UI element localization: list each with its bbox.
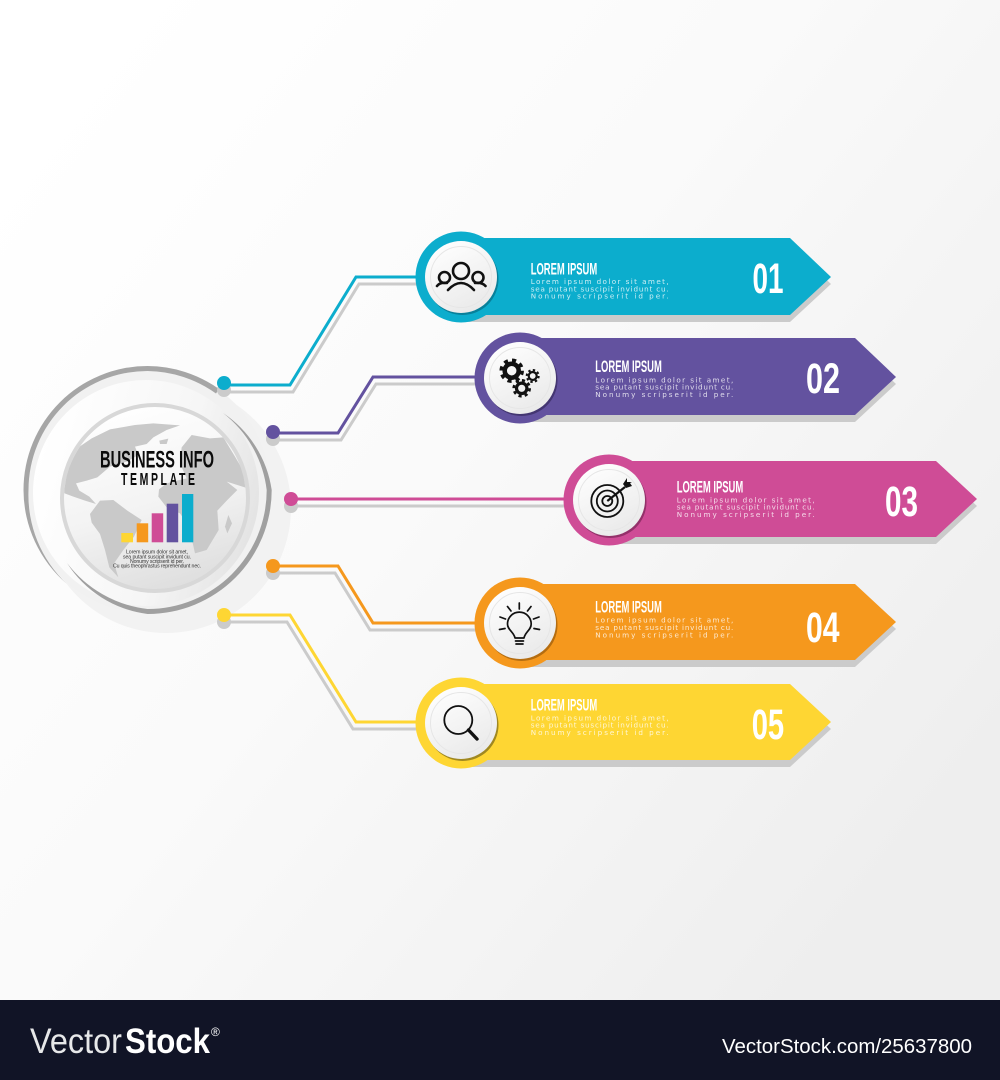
footer logo: Vector xyxy=(30,1022,122,1061)
text: step 01: Lorem ipsum dolor sit amet, xyxy=(531,277,669,286)
text block: Lorem ipsum dolor sit amet, xyxy=(126,550,188,556)
connector 3 xyxy=(284,492,570,513)
world map xyxy=(60,423,253,577)
connector 2 xyxy=(266,377,480,446)
icon: people xyxy=(425,241,498,315)
text: step 04 xyxy=(595,599,840,652)
connector lines xyxy=(217,277,570,729)
text: step 05 xyxy=(531,696,784,749)
text: step 04: LOREM IPSUM xyxy=(595,599,662,617)
text: step 05: Nonumy scripserit id per. xyxy=(531,728,669,737)
text: step 01: 01 xyxy=(752,255,784,303)
text block: sea putant suscipit invidunt cu. xyxy=(123,554,191,560)
text: step 03: sea putant suscipit invidunt cu. xyxy=(677,503,815,512)
text block: Cu quis theophrastus reprehendunt nec. xyxy=(113,564,201,570)
panel: step 04 xyxy=(474,578,896,668)
connector 4 xyxy=(266,559,480,630)
text: step 02: sea putant suscipit invidunt cu. xyxy=(595,383,733,392)
connector 1 xyxy=(217,277,420,397)
text: step 01: LOREM IPSUM xyxy=(531,260,597,278)
text: step 03: Lorem ipsum dolor sit amet, xyxy=(677,495,815,504)
text: step 02: Lorem ipsum dolor sit amet, xyxy=(595,375,733,384)
text: step 05: Lorem ipsum dolor sit amet, xyxy=(531,713,669,722)
text: step 01: sea putant suscipit invidunt cu. xyxy=(531,284,669,293)
text: step 03: Nonumy scripserit id per. xyxy=(677,510,815,519)
text block xyxy=(113,550,201,570)
text: step 05: sea putant suscipit invidunt cu. xyxy=(531,721,669,730)
text: step 02: Nonumy scripserit id per. xyxy=(595,390,733,399)
icon: gears xyxy=(484,342,558,416)
panel: step 03 xyxy=(564,454,977,546)
text: step 03: 03 xyxy=(885,478,918,526)
text: step 03 xyxy=(677,478,918,526)
text: step 01 xyxy=(531,255,784,303)
text block: Nonumy scripserit id per. xyxy=(130,559,184,565)
footer logo xyxy=(30,1022,220,1061)
title xyxy=(100,446,214,490)
bar chart xyxy=(121,494,193,542)
footer bar xyxy=(0,1000,1000,1080)
text: step 03: LOREM IPSUM xyxy=(677,478,743,496)
title: BUSINESS INFO xyxy=(100,446,214,473)
text: step 04: 04 xyxy=(806,604,840,652)
icon: light bulb xyxy=(484,587,558,661)
panel: step 01 xyxy=(416,232,831,322)
title: TEMPLATE xyxy=(121,470,195,490)
footer logo: ® xyxy=(211,1025,220,1039)
text: step 02: 02 xyxy=(806,355,840,403)
icon: magnifier xyxy=(425,687,498,761)
text: step 04: Nonumy scripserit id per. xyxy=(595,630,733,639)
panel: step 02 xyxy=(474,332,896,424)
text: step 02 xyxy=(595,355,840,403)
text: step 04: Lorem ipsum dolor sit amet, xyxy=(595,616,733,625)
connector 5 xyxy=(217,608,420,729)
footer logo: Stock xyxy=(125,1022,210,1061)
text: step 04: sea putant suscipit invidunt cu. xyxy=(595,623,733,632)
icon: target xyxy=(573,464,646,538)
footer url: VectorStock.com/25637800 xyxy=(722,1036,972,1058)
text: step 02: LOREM IPSUM xyxy=(595,358,662,376)
text: step 05: 05 xyxy=(752,701,784,749)
panel: central globe badge xyxy=(24,366,291,633)
text: step 01: Nonumy scripserit id per. xyxy=(531,292,669,301)
text: step 05: LOREM IPSUM xyxy=(531,696,597,714)
panel: step 05 xyxy=(416,678,831,768)
